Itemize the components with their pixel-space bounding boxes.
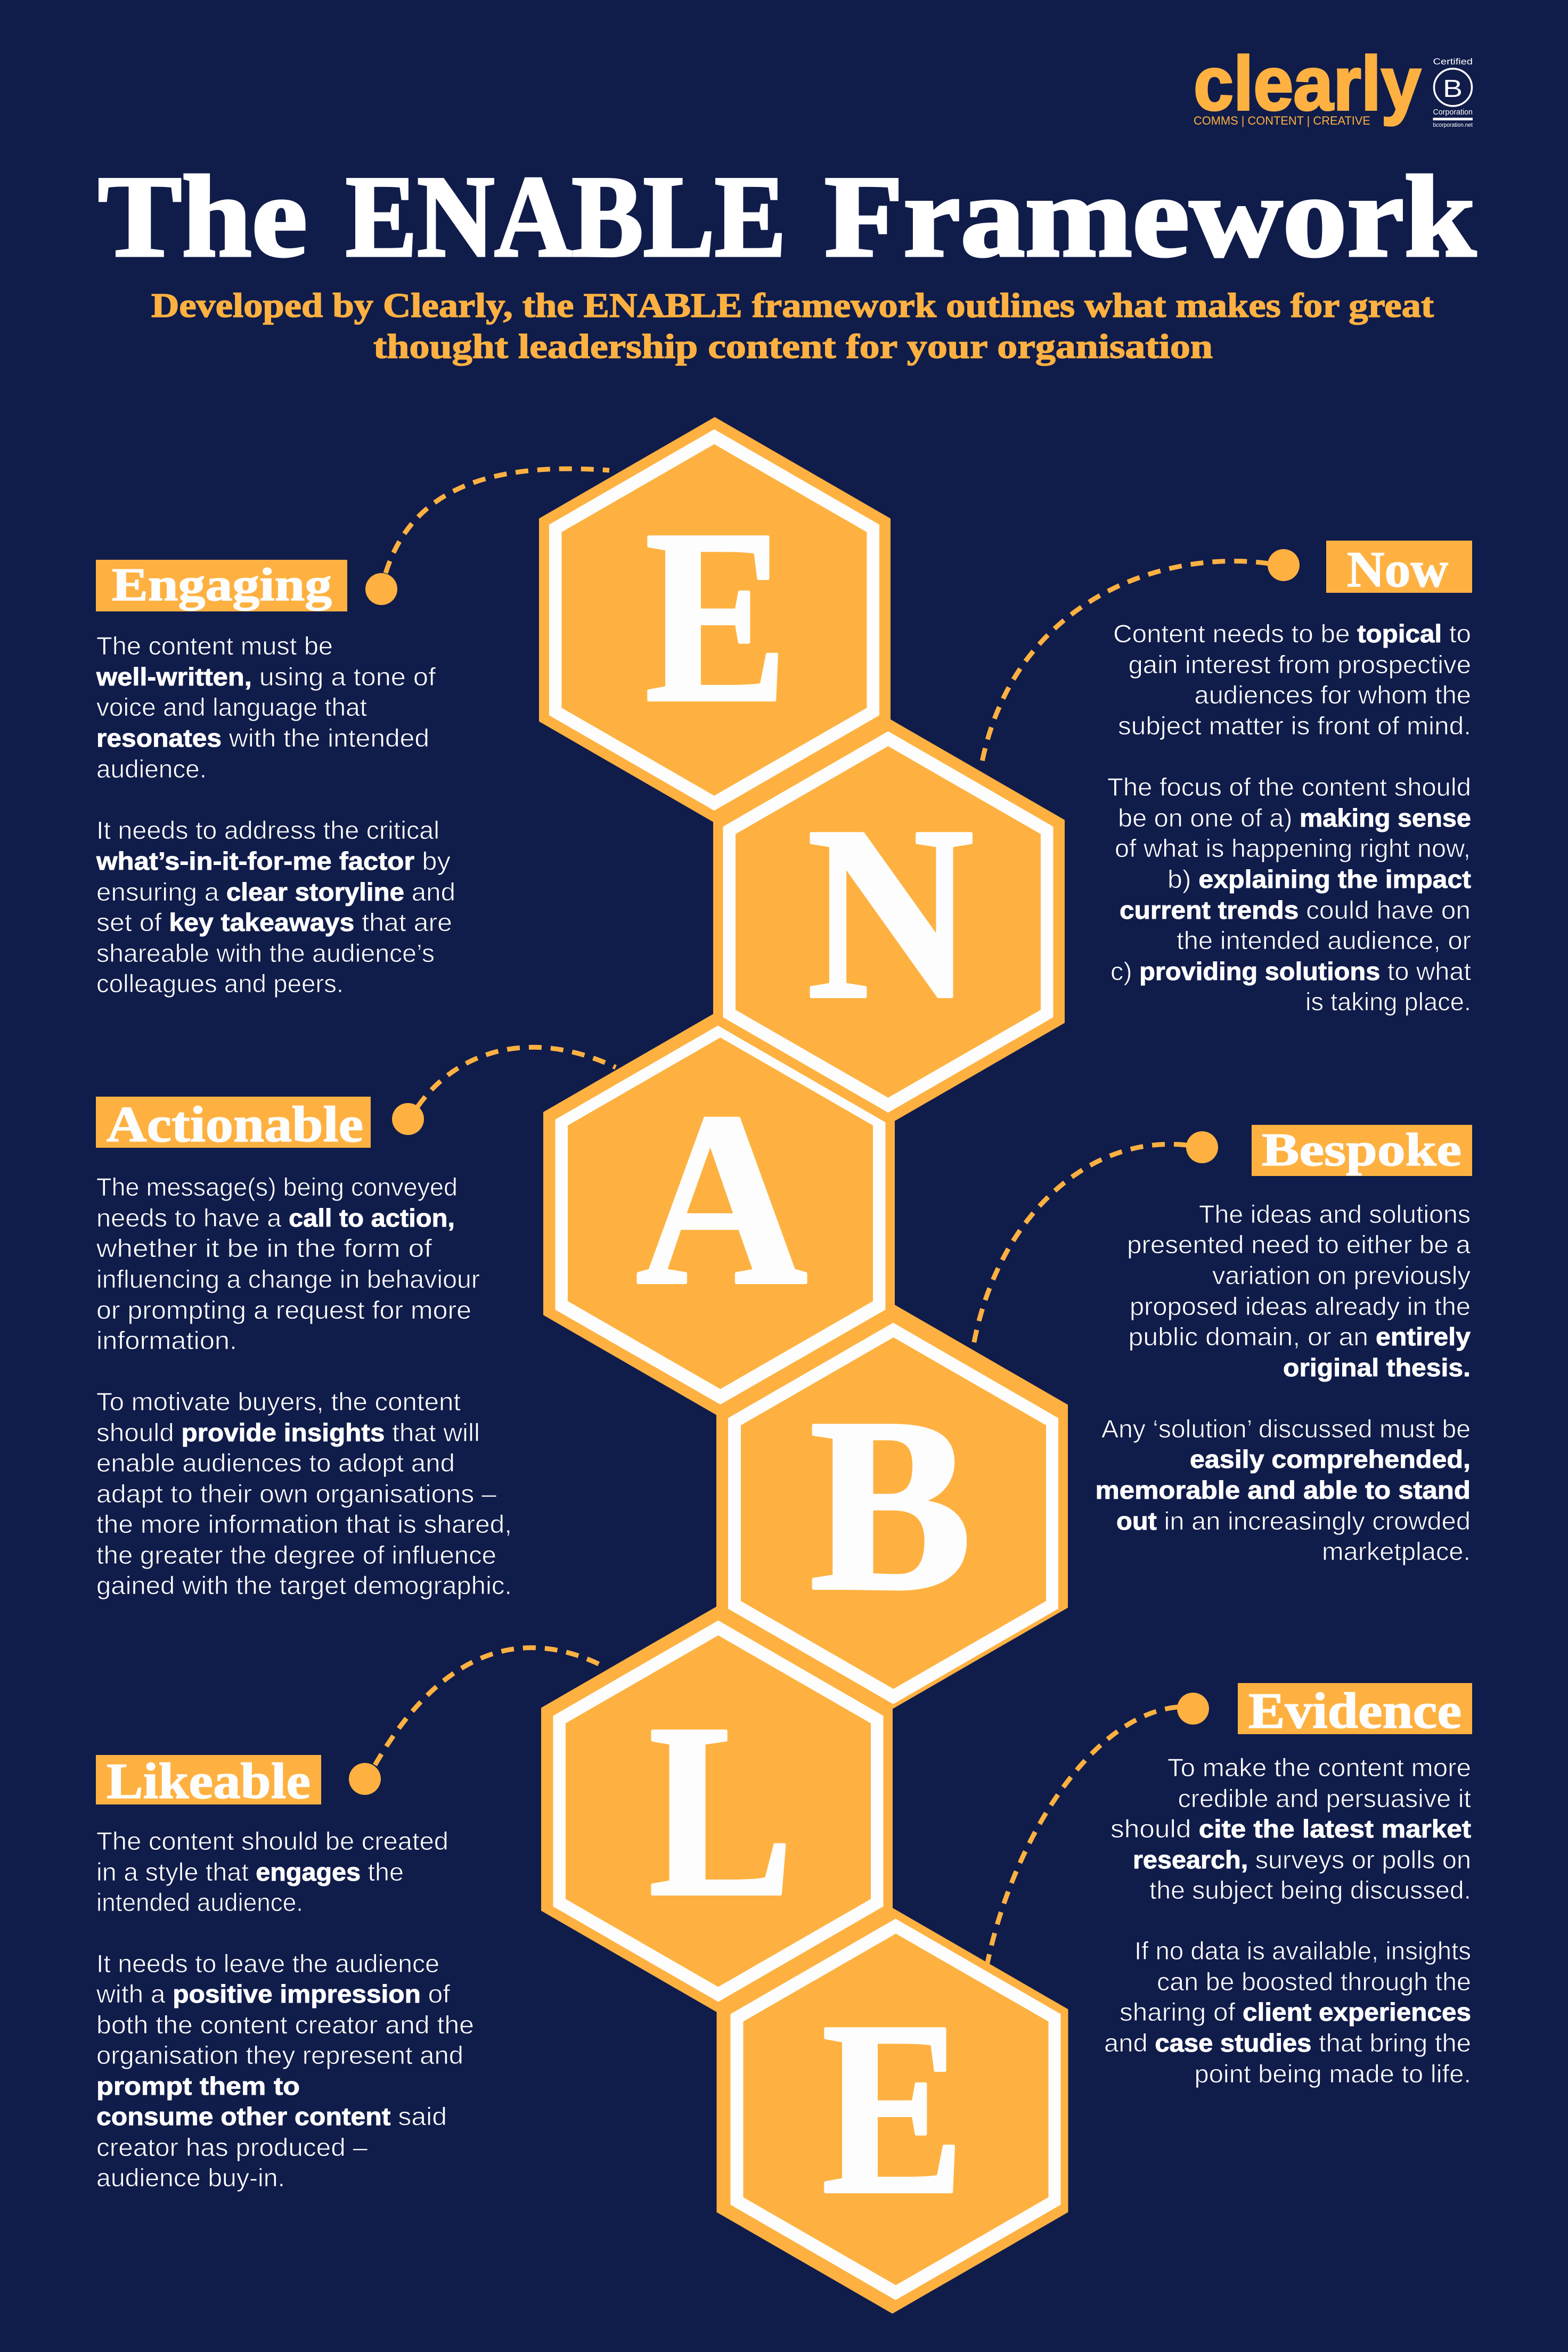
text block: bespoke: memorable and able to stand [1095, 1476, 1471, 1504]
connector: actionable [418, 1047, 616, 1107]
hexagon: E (Engaging): E [645, 479, 788, 754]
dot: engaging [365, 573, 397, 605]
hexagon: B (Bespoke): B [810, 1367, 972, 1643]
text block: actionable: gained with the target demographic. [96, 1571, 512, 1599]
text block: bespoke: presented need to either be a [1127, 1230, 1471, 1259]
text block: now: current trends could have on [1120, 896, 1471, 924]
text block: engaging: audience. [96, 755, 207, 783]
hexagon: L (Likeable) [541, 1606, 893, 2012]
text block: now: the intended audience, or [1177, 926, 1471, 954]
heading: now: Now [1347, 541, 1448, 598]
text block: engaging: voice and language that [96, 693, 367, 721]
heading: actionable: Actionable [107, 1096, 363, 1153]
hexagon: N (Now): N [807, 775, 974, 1051]
text block: engaging: colleagues and peers. [96, 969, 344, 998]
text block: now [1107, 619, 1471, 1016]
text block: likeable: intended audience. [96, 1888, 303, 1916]
dot: actionable [392, 1103, 424, 1135]
text block: evidence: point being made to life. [1194, 2060, 1471, 2088]
logo: certified B corporation badge: Certified [1433, 56, 1473, 67]
text block: now: of what is happening right now, [1115, 834, 1471, 862]
text block: actionable: To motivate buyers, the content [96, 1387, 461, 1416]
dot: evidence [1177, 1693, 1209, 1725]
subtitle: Developed by Clearly, the ENABLE framework outlines what makes for great [151, 287, 1434, 325]
heading: bespoke: Bespoke [1262, 1124, 1461, 1176]
dot: now [1268, 549, 1300, 581]
text block: now: audiences for whom the [1194, 681, 1471, 709]
text block: engaging: It needs to address the critical [96, 816, 439, 844]
text block: actionable: The message(s) being conveyed [96, 1173, 458, 1201]
panel: evidence [986, 1683, 1472, 2088]
text block: likeable: in a style that engages the [96, 1858, 404, 1886]
text block: now: The focus of the content should [1107, 773, 1471, 801]
text block: engaging [96, 632, 455, 998]
text block: actionable: enable audiences to adopt and [96, 1449, 455, 1477]
text block: likeable [96, 1827, 474, 2192]
subtitle: thought leadership content for your organisation [373, 328, 1213, 366]
text block: evidence: and case studies that bring the [1104, 2029, 1471, 2057]
title [98, 152, 1476, 281]
logo: clearly: COMMS | CONTENT | CREATIVE [1194, 114, 1370, 127]
text block: engaging: resonates with the intended [96, 724, 429, 752]
hexagon: E (Evidence): E [822, 1971, 965, 2246]
text block: bespoke: out in an increasingly crowded [1116, 1507, 1471, 1535]
connector: now [981, 561, 1269, 767]
text block: bespoke: Any ‘solution’ discussed must be [1101, 1415, 1471, 1443]
text block: engaging: set of key takeaways that are [96, 908, 452, 936]
text block: engaging: well-written, using a tone of [96, 663, 436, 691]
panel: actionable [96, 1047, 616, 1599]
hexagon: L (Likeable): L [649, 1673, 794, 1948]
text block: actionable: the greater the degree of influence [96, 1541, 496, 1569]
text block: likeable: creator has produced – [96, 2133, 368, 2161]
text block: evidence: If no data is available, insights [1134, 1937, 1471, 1965]
text block: likeable: both the content creator and the [96, 2011, 474, 2039]
text block: bespoke: proposed ideas already in the [1130, 1292, 1471, 1320]
dot: bespoke [1186, 1131, 1218, 1163]
text block: bespoke: original thesis. [1283, 1353, 1471, 1382]
hexagon: A (Actionable): A [636, 1061, 807, 1337]
text block: evidence: credible and persuasive it [1178, 1784, 1471, 1812]
text block: actionable [96, 1173, 512, 1599]
text block: actionable: information. [96, 1326, 237, 1354]
logo: certified B corporation badge: bcorporation.net [1433, 122, 1473, 128]
text block: actionable: needs to have a call to action, [96, 1204, 455, 1232]
text block: now: b) explaining the impact [1167, 865, 1471, 893]
heading: engaging: Engaging [112, 559, 332, 611]
text block: now: subject matter is front of mind. [1118, 712, 1471, 740]
text block: actionable: influencing a change in behaviour [96, 1265, 480, 1293]
text block: evidence: sharing of client experiences [1120, 1998, 1471, 2026]
text block: evidence: should cite the latest market [1110, 1815, 1471, 1843]
text block: likeable: organisation they represent and [96, 2041, 463, 2069]
hexagon: E (Evidence) [717, 1908, 1068, 2314]
text block: bespoke: marketplace. [1322, 1537, 1471, 1565]
text block: engaging: shareable with the audience’s [96, 939, 435, 967]
hexagon: A (Actionable) [543, 1011, 895, 1417]
panel: engaging [96, 469, 609, 998]
text block: likeable: with a positive impression of [96, 1980, 451, 2008]
hexagon: N (Now) [713, 718, 1065, 1124]
text block: likeable: prompt them to [96, 2072, 300, 2100]
subtitle [151, 287, 1434, 366]
text block: evidence: the subject being discussed. [1149, 1876, 1471, 1904]
text block: likeable: The content should be created [96, 1827, 448, 1855]
text block: now: c) providing solutions to what [1110, 957, 1471, 985]
logo: clearly: clearly [1194, 42, 1421, 126]
text block: bespoke: The ideas and solutions [1199, 1200, 1471, 1228]
logo: certified B corporation badge: B [1443, 75, 1463, 102]
text block: actionable: adapt to their own organisations – [96, 1480, 497, 1508]
text block: bespoke: variation on previously [1212, 1261, 1471, 1289]
text block: actionable: should provide insights that will [96, 1418, 480, 1447]
text block: now: gain interest from prospective [1128, 650, 1471, 679]
heading: likeable: Likeable [107, 1753, 311, 1809]
text block: evidence: research, surveys or polls on [1133, 1845, 1471, 1874]
heading: now [1326, 541, 1472, 598]
text block: bespoke: easily comprehended, [1190, 1445, 1471, 1473]
text block: likeable: It needs to leave the audience [96, 1949, 439, 1978]
dot: likeable [349, 1763, 381, 1795]
text block: likeable: consume other content said [96, 2102, 447, 2130]
text block: engaging: ensuring a clear storyline and [96, 878, 455, 906]
connector: engaging [386, 469, 609, 573]
text block: likeable: audience buy-in. [96, 2163, 285, 2192]
text block: bespoke: public domain, or an entirely [1128, 1322, 1471, 1351]
logo: certified B corporation badge: Corporation [1433, 108, 1473, 117]
title: The [98, 152, 307, 281]
panel: now [981, 541, 1472, 1016]
connector: bespoke [973, 1144, 1187, 1348]
text block: actionable: the more information that is shared, [96, 1510, 512, 1538]
text block: actionable: whether it be in the form of [96, 1234, 432, 1262]
text block: evidence: can be boosted through the [1157, 1967, 1471, 1996]
text block: now: is taking place. [1305, 987, 1471, 1016]
text block: evidence [1104, 1753, 1471, 2088]
text block: engaging: what’s-in-it-for-me factor by [96, 847, 451, 875]
text block: engaging: The content must be [96, 632, 333, 660]
panel: bespoke [973, 1124, 1472, 1565]
text block: now: be on one of a) making sense [1118, 804, 1471, 832]
heading: evidence: Evidence [1248, 1683, 1461, 1739]
text block: now: Content needs to be topical to [1113, 619, 1471, 648]
connector: evidence [986, 1707, 1178, 1968]
logo: certified B corporation badge [1433, 56, 1473, 128]
text block: evidence: To make the content more [1167, 1753, 1471, 1782]
title: Framework [824, 152, 1476, 281]
panel: likeable [96, 1648, 601, 2192]
title: ENABLE [346, 152, 786, 281]
text block: actionable: or prompting a request for more [96, 1296, 471, 1324]
hexagon: B (Bespoke) [716, 1303, 1068, 1709]
text block: bespoke [1095, 1200, 1471, 1565]
connector: likeable [375, 1648, 601, 1765]
hexagon: E (Engaging) [539, 417, 891, 823]
